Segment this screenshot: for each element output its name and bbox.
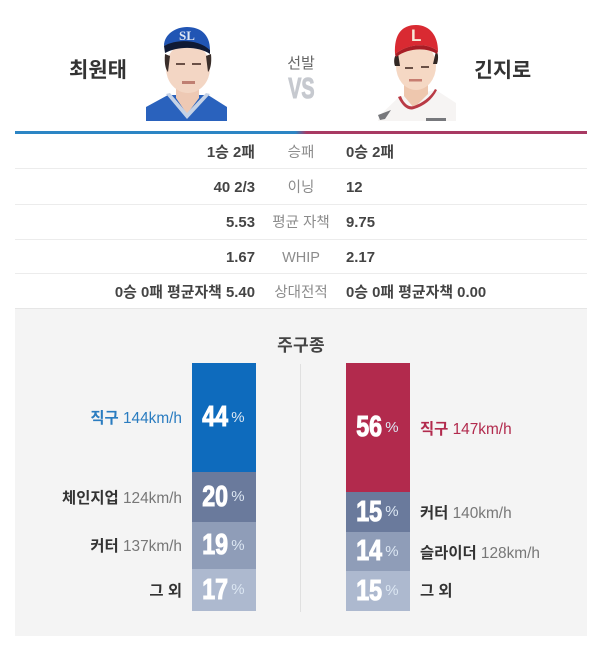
row: whip: WHIP bbox=[282, 250, 320, 266]
player name: left pitcher: 최원태 bbox=[69, 59, 127, 82]
vs mark: VS bbox=[288, 73, 314, 105]
label: right fastball: 직구 147km/h bbox=[420, 421, 512, 438]
label: right other: 그 외 bbox=[420, 583, 453, 600]
header rule: team colours bbox=[15, 131, 587, 134]
segment 44: 44 bbox=[203, 401, 229, 433]
label: starter: 선발 bbox=[287, 55, 315, 72]
segment 15: 15 bbox=[357, 496, 383, 528]
segment 17 bbox=[192, 569, 256, 611]
row: whip bbox=[226, 250, 375, 266]
row: whip: 1.67 bbox=[226, 250, 255, 266]
segment 14: 14 bbox=[357, 535, 383, 567]
row: win loss: 1승 2패 bbox=[207, 145, 255, 161]
row: era bbox=[226, 214, 375, 231]
player photo: right pitcher: L bbox=[411, 26, 421, 45]
segment 14 bbox=[346, 532, 410, 571]
bar: left pitcher pitch share bbox=[192, 363, 256, 611]
player photo: left pitcher: SL bbox=[179, 28, 195, 43]
segment 19: 19 bbox=[203, 529, 229, 561]
label: left other: 그 외 bbox=[149, 583, 182, 600]
row: whip: 2.17 bbox=[346, 250, 375, 266]
segment 19: % bbox=[231, 537, 245, 554]
row: win loss bbox=[207, 144, 394, 161]
segment 44 bbox=[192, 363, 256, 472]
row: era: 9.75 bbox=[346, 215, 375, 231]
segment 44: % bbox=[231, 409, 245, 426]
bar: right pitcher pitch share bbox=[346, 363, 410, 611]
row: innings: 이닝 bbox=[288, 180, 314, 196]
player photo: right pitcher bbox=[378, 25, 456, 121]
segment 17: 17 bbox=[203, 574, 229, 606]
label: right slider: 슬라이더 128km/h bbox=[420, 545, 540, 562]
segment 17: % bbox=[231, 581, 245, 598]
row: era: 5.53 bbox=[226, 215, 255, 231]
panel heading: 주구종 bbox=[277, 336, 325, 355]
segment 15: 15 bbox=[357, 574, 383, 606]
row: innings: 12 bbox=[346, 180, 363, 196]
stats table bbox=[15, 144, 587, 301]
label: left fastball: 직구 144km/h bbox=[90, 410, 182, 427]
center divider bbox=[300, 364, 301, 612]
label: left changeup: 체인지업 124km/h bbox=[62, 490, 182, 507]
label: right cutter: 커터 140km/h bbox=[420, 505, 512, 522]
row: innings: 40 2/3 bbox=[214, 180, 255, 196]
segment 56: % bbox=[385, 419, 399, 436]
row: innings bbox=[214, 180, 363, 196]
panel: pitch mix bbox=[15, 308, 587, 636]
row: win loss: 승패 bbox=[288, 145, 314, 161]
player name: right pitcher: 긴지로 bbox=[474, 59, 531, 82]
row: win loss: 0승 2패 bbox=[346, 145, 394, 161]
segment 14: % bbox=[385, 543, 399, 560]
segment 20: % bbox=[231, 488, 245, 505]
segment 15 bbox=[346, 492, 410, 532]
row: head to head: 0승 0패 평균자책 5.40 bbox=[115, 285, 255, 301]
row: era: 평균 자책 bbox=[272, 215, 330, 231]
row: head to head: 0승 0패 평균자책 0.00 bbox=[346, 285, 486, 301]
segment 15: % bbox=[385, 582, 399, 599]
segment 56: 56 bbox=[357, 411, 383, 443]
label: left cutter: 커터 137km/h bbox=[90, 538, 182, 555]
segment 15: % bbox=[385, 503, 399, 520]
segment 20: 20 bbox=[203, 480, 229, 512]
segment 56 bbox=[346, 363, 410, 492]
row: head to head bbox=[115, 284, 486, 301]
segment 19 bbox=[192, 522, 256, 569]
row: head to head: 상대전적 bbox=[274, 285, 328, 301]
player photo: left pitcher bbox=[146, 27, 227, 121]
segment 15 bbox=[346, 571, 410, 611]
segment 20 bbox=[192, 472, 256, 522]
